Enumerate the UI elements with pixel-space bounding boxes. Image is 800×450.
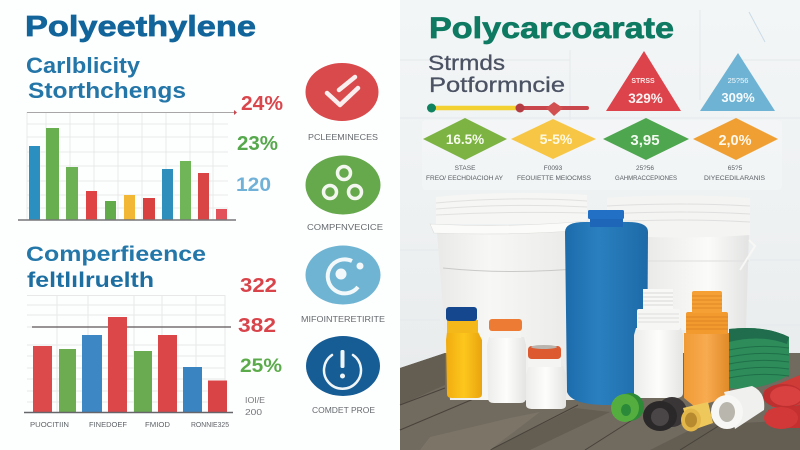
- diamond: yellow stat: [511, 119, 596, 159]
- axis labels: RONNIE325: [191, 420, 229, 429]
- diamond captions: DIYECEDILARANIS: [704, 175, 766, 182]
- heading: compliance: [26, 243, 206, 292]
- triangle: red stat: 329%: [628, 91, 663, 106]
- axis labels: PUOCITIIN: [30, 420, 69, 429]
- diamond captions: STASE: [455, 165, 476, 172]
- triangle: blue stat: 25?56: [728, 76, 748, 85]
- triangle: blue stat: 309%: [721, 90, 755, 105]
- tall white bottle: [634, 289, 683, 398]
- axis labels: FINEDOEF: [89, 420, 127, 429]
- triangle: red stat: [606, 51, 681, 111]
- diamond captions: [426, 165, 766, 182]
- stat: 382: 382: [238, 315, 276, 337]
- yellow bottle: [446, 307, 482, 398]
- heading: strength performance: Potformncie: [429, 74, 565, 97]
- slider arrow: [427, 102, 587, 116]
- diamond: dark green stat: 3,95: [630, 132, 660, 149]
- heading: compliance: feltlılruelth: [27, 269, 154, 292]
- label: midpoint: MIFOINTERETIRITE: [301, 314, 385, 324]
- right bucket: [607, 196, 755, 330]
- diamond captions: FEOUIETTE MEIOCMSS: [517, 175, 592, 182]
- heading: capability strengths: [26, 53, 186, 103]
- stat: 25%: 25%: [240, 356, 282, 377]
- photo: plastic containers on wood: [400, 193, 800, 450]
- orange bottle: [684, 291, 729, 407]
- title: polycarbonate: Polycarcoarate: [429, 12, 674, 45]
- icon: red check: [306, 63, 378, 121]
- diamond captions: GAHMRACCEPIONES: [615, 175, 678, 182]
- icon: blue ring: [306, 246, 380, 304]
- panel: polyethylene: [0, 0, 400, 450]
- white tube: [711, 386, 764, 429]
- label: combat probe: COMDET PROE: [312, 405, 375, 415]
- icon: navy alert: [306, 336, 380, 396]
- axis labels: FMIOD: [145, 420, 171, 429]
- diamond captions: 65?5: [728, 165, 743, 172]
- diamond: orange stat: 2,0%: [718, 133, 752, 149]
- wooden table: [400, 353, 800, 450]
- green coil: [729, 328, 789, 389]
- diamond: green stat: 16.5%: [446, 132, 484, 147]
- diamond captions: F0093: [544, 165, 563, 172]
- heading: capability strengths: Storthchengs: [28, 78, 186, 103]
- heading: capability strengths: Carlblicity: [26, 53, 141, 78]
- bar chart: strengths: [18, 110, 237, 220]
- axis note: 200: [245, 407, 262, 417]
- red tubes: [763, 375, 800, 429]
- axis note: [245, 395, 265, 417]
- diamond: orange stat: [693, 118, 778, 160]
- triangle: red stat: STRSS: [631, 78, 655, 85]
- small white bottle: [526, 345, 566, 409]
- axis note: IOI/E: [245, 395, 265, 405]
- stat: 24%: 24%: [241, 93, 283, 115]
- green tube: [611, 393, 644, 422]
- diamond: green stat: [423, 118, 507, 160]
- stat: 23%: 23%: [237, 133, 278, 155]
- label: preeminences: PCLEEMINECES: [308, 132, 378, 142]
- panel: polycarbonate: [400, 0, 800, 450]
- heading: strength performance: Strmds: [428, 52, 505, 75]
- label: competence: COMPFNVECICE: [307, 222, 383, 232]
- bar chart: compliance: [24, 295, 233, 412]
- blue bottle: [565, 210, 648, 405]
- title: polyethylene: Polyeethylene: [25, 11, 256, 43]
- yellow tube: [681, 402, 713, 432]
- diamond: yellow stat: 5-5%: [540, 131, 573, 147]
- icon: green rings: [306, 156, 380, 214]
- stat: 322: 322: [240, 275, 277, 297]
- white bottle: [487, 319, 526, 403]
- left bucket: [430, 193, 587, 400]
- diamond captions: FREO/ EECHDIACIOH AY: [426, 175, 504, 182]
- diamond captions: 25?56: [636, 165, 654, 172]
- heading: compliance: Comperfieence: [26, 243, 206, 266]
- stat: 120: 120: [236, 175, 271, 196]
- heading: strength performance: [428, 52, 565, 97]
- black tube: [643, 397, 687, 431]
- axis labels: [30, 420, 229, 429]
- diamond: dark green stat: [603, 118, 689, 160]
- triangle: blue stat: [700, 53, 775, 111]
